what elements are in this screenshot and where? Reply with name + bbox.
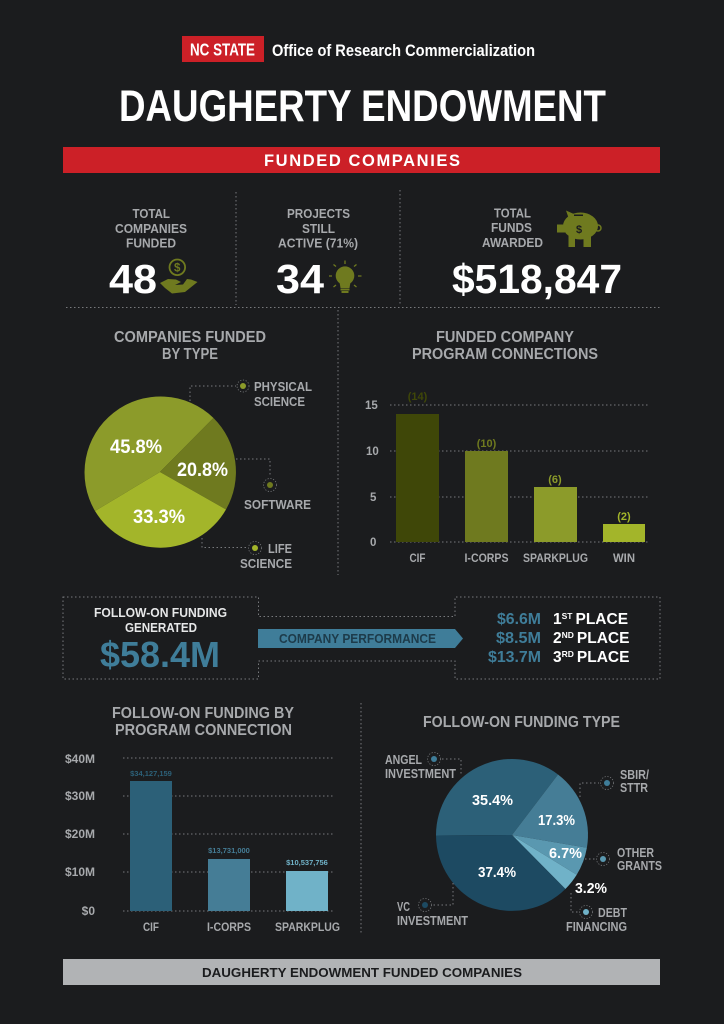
bar chart: CIF — [143, 922, 159, 934]
callout: life science: SCIENCE — [240, 557, 292, 571]
bar chart: $0 — [82, 904, 95, 918]
follow-on funding total: FOLLOW-ON FUNDING — [94, 605, 227, 620]
panel: follow-on funding type — [385, 714, 662, 934]
callout: physical science: PHYSICAL — [254, 380, 312, 394]
bar chart: 10 — [366, 446, 379, 458]
footer banner: DAUGHERTY ENDOWMENT FUNDED COMPANIES — [202, 965, 522, 980]
stat: total companies funded — [109, 207, 198, 302]
pie chart: 3.2% — [575, 880, 607, 897]
bar chart: 15 — [365, 400, 378, 412]
pie chart: 45.8% — [110, 437, 162, 458]
place rankings: RD — [562, 649, 574, 659]
bar chart: WIN — [613, 553, 635, 565]
icon: light bulb — [329, 260, 362, 293]
callout: debt financing: DEBT — [598, 906, 627, 920]
stat: total funds awarded — [452, 206, 622, 302]
bar chart: $10,537,756 — [286, 858, 328, 867]
header logo: NC STATE — [190, 40, 255, 60]
callout: angel investment — [385, 752, 456, 781]
callout: other grants: GRANTS — [617, 859, 662, 873]
heading — [114, 329, 266, 363]
panel: companies funded by type — [85, 329, 312, 571]
section banner: funded companies — [63, 147, 660, 173]
bar chart — [65, 752, 340, 934]
stat: projects still active — [276, 207, 362, 302]
place rankings: $13.7M — [488, 649, 541, 666]
stat: total companies funded: FUNDED — [126, 236, 176, 250]
place rankings: $6.6M — [497, 611, 541, 628]
header logo: Office of Research Commercialization — [272, 42, 535, 60]
pie chart: 6.7% — [549, 845, 582, 862]
callout: other grants — [596, 846, 662, 873]
heading: FOLLOW-ON FUNDING BY — [112, 705, 295, 722]
bar chart: (2) — [617, 511, 631, 523]
stat: projects still active: ACTIVE (71%) — [278, 236, 358, 250]
icon: piggy bank — [557, 210, 601, 247]
heading: FOLLOW-ON FUNDING TYPE — [423, 714, 620, 731]
place rankings: PLACE — [577, 649, 629, 666]
bar chart: I-CORPS — [207, 922, 251, 934]
panel: follow-on funding by program connection — [65, 705, 340, 934]
pie chart: 33.3% — [133, 507, 185, 528]
place rankings: 2 — [553, 630, 562, 647]
pie chart — [436, 759, 607, 911]
callout: software — [244, 478, 311, 512]
callout: sbir/sttr: STTR — [620, 781, 648, 795]
stat: projects still active: PROJECTS — [287, 207, 350, 221]
callout: vc investment — [397, 898, 468, 928]
footer banner — [63, 959, 660, 985]
stat: total companies funded: TOTAL — [132, 207, 170, 221]
bar chart: I-CORPS — [464, 553, 509, 565]
bar chart: $30M — [65, 789, 95, 803]
bar chart: SPARKPLUG — [275, 922, 340, 934]
callout: life science — [240, 542, 292, 571]
bar chart: 0 — [370, 537, 376, 549]
callout: vc investment: VC — [397, 900, 410, 914]
follow-on funding total: $58.4M — [100, 634, 220, 675]
place rankings — [488, 611, 629, 666]
place rankings: 1 — [553, 611, 562, 628]
callout: vc investment: INVESTMENT — [397, 914, 468, 928]
callout: angel investment: INVESTMENT — [385, 767, 456, 781]
callout: debt financing — [566, 906, 627, 934]
header logo — [182, 36, 535, 62]
callout: software: SOFTWARE — [244, 498, 311, 512]
stat: total funds awarded: AWARDED — [482, 236, 543, 250]
heading — [112, 705, 295, 739]
title: DAUGHERTY ENDOWMENT — [119, 82, 606, 131]
bar chart: SPARKPLUG — [523, 553, 588, 565]
arrow: company performance: COMPANY PERFORMANCE — [279, 631, 436, 646]
place rankings: PLACE — [577, 630, 629, 647]
pie chart — [85, 396, 236, 548]
follow-on funding total: GENERATED — [125, 620, 197, 635]
heading: PROGRAM CONNECTIONS — [412, 346, 598, 363]
bar chart — [365, 391, 650, 565]
stat: total funds awarded: $518,847 — [452, 256, 622, 302]
panel: funded company program connections — [365, 329, 650, 565]
heading: COMPANIES FUNDED — [114, 329, 266, 346]
bar chart: $13,731,000 — [208, 846, 250, 855]
callout: sbir/sttr: SBIR/ — [620, 768, 649, 782]
heading: BY TYPE — [162, 346, 218, 363]
bar chart: (14) — [408, 391, 428, 403]
callout: debt financing: FINANCING — [566, 920, 627, 934]
arrow: company performance — [258, 629, 463, 648]
stat: total companies funded: COMPANIES — [115, 222, 187, 236]
icon: piggy bank: $ — [576, 224, 582, 236]
place rankings: ND — [562, 630, 574, 640]
callout: angel investment: ANGEL — [385, 753, 422, 767]
place rankings: $8.5M — [496, 630, 541, 647]
place rankings: ST — [562, 611, 573, 621]
stat: total companies funded: 48 — [109, 256, 157, 302]
bar chart: (6) — [548, 474, 562, 486]
stat: projects still active: 34 — [276, 256, 324, 302]
pie chart: 37.4% — [478, 864, 516, 881]
heading: PROGRAM CONNECTION — [115, 722, 292, 739]
pie chart: 35.4% — [472, 792, 513, 809]
stat: projects still active: STILL — [302, 222, 335, 236]
bar chart: CIF — [410, 553, 426, 565]
icon: hand with coin: $ — [174, 262, 181, 274]
pie chart: 17.3% — [538, 812, 575, 829]
bar chart: $20M — [65, 827, 95, 841]
heading — [412, 329, 598, 363]
stat: total funds awarded: TOTAL — [494, 206, 531, 220]
bar chart: (10) — [477, 438, 497, 450]
bar chart: $40M — [65, 752, 95, 766]
callout: other grants: OTHER — [617, 846, 654, 860]
callout: physical science: SCIENCE — [254, 395, 305, 409]
bar chart: $10M — [65, 865, 95, 879]
place rankings: 3 — [553, 649, 562, 666]
follow-on funding total — [94, 605, 227, 675]
section banner: funded companies: FUNDED COMPANIES — [264, 152, 460, 170]
callout: life science: LIFE — [268, 542, 292, 556]
stat: total funds awarded: FUNDS — [491, 221, 532, 235]
heading: FUNDED COMPANY — [436, 329, 575, 346]
bar chart: $34,127,159 — [130, 769, 172, 778]
callout: sbir/sttr — [600, 768, 649, 795]
place rankings: PLACE — [576, 611, 628, 628]
bar chart: 5 — [370, 492, 377, 504]
callout: physical science — [237, 380, 312, 409]
panel: company performance — [63, 597, 660, 679]
pie chart: 20.8% — [177, 460, 228, 481]
